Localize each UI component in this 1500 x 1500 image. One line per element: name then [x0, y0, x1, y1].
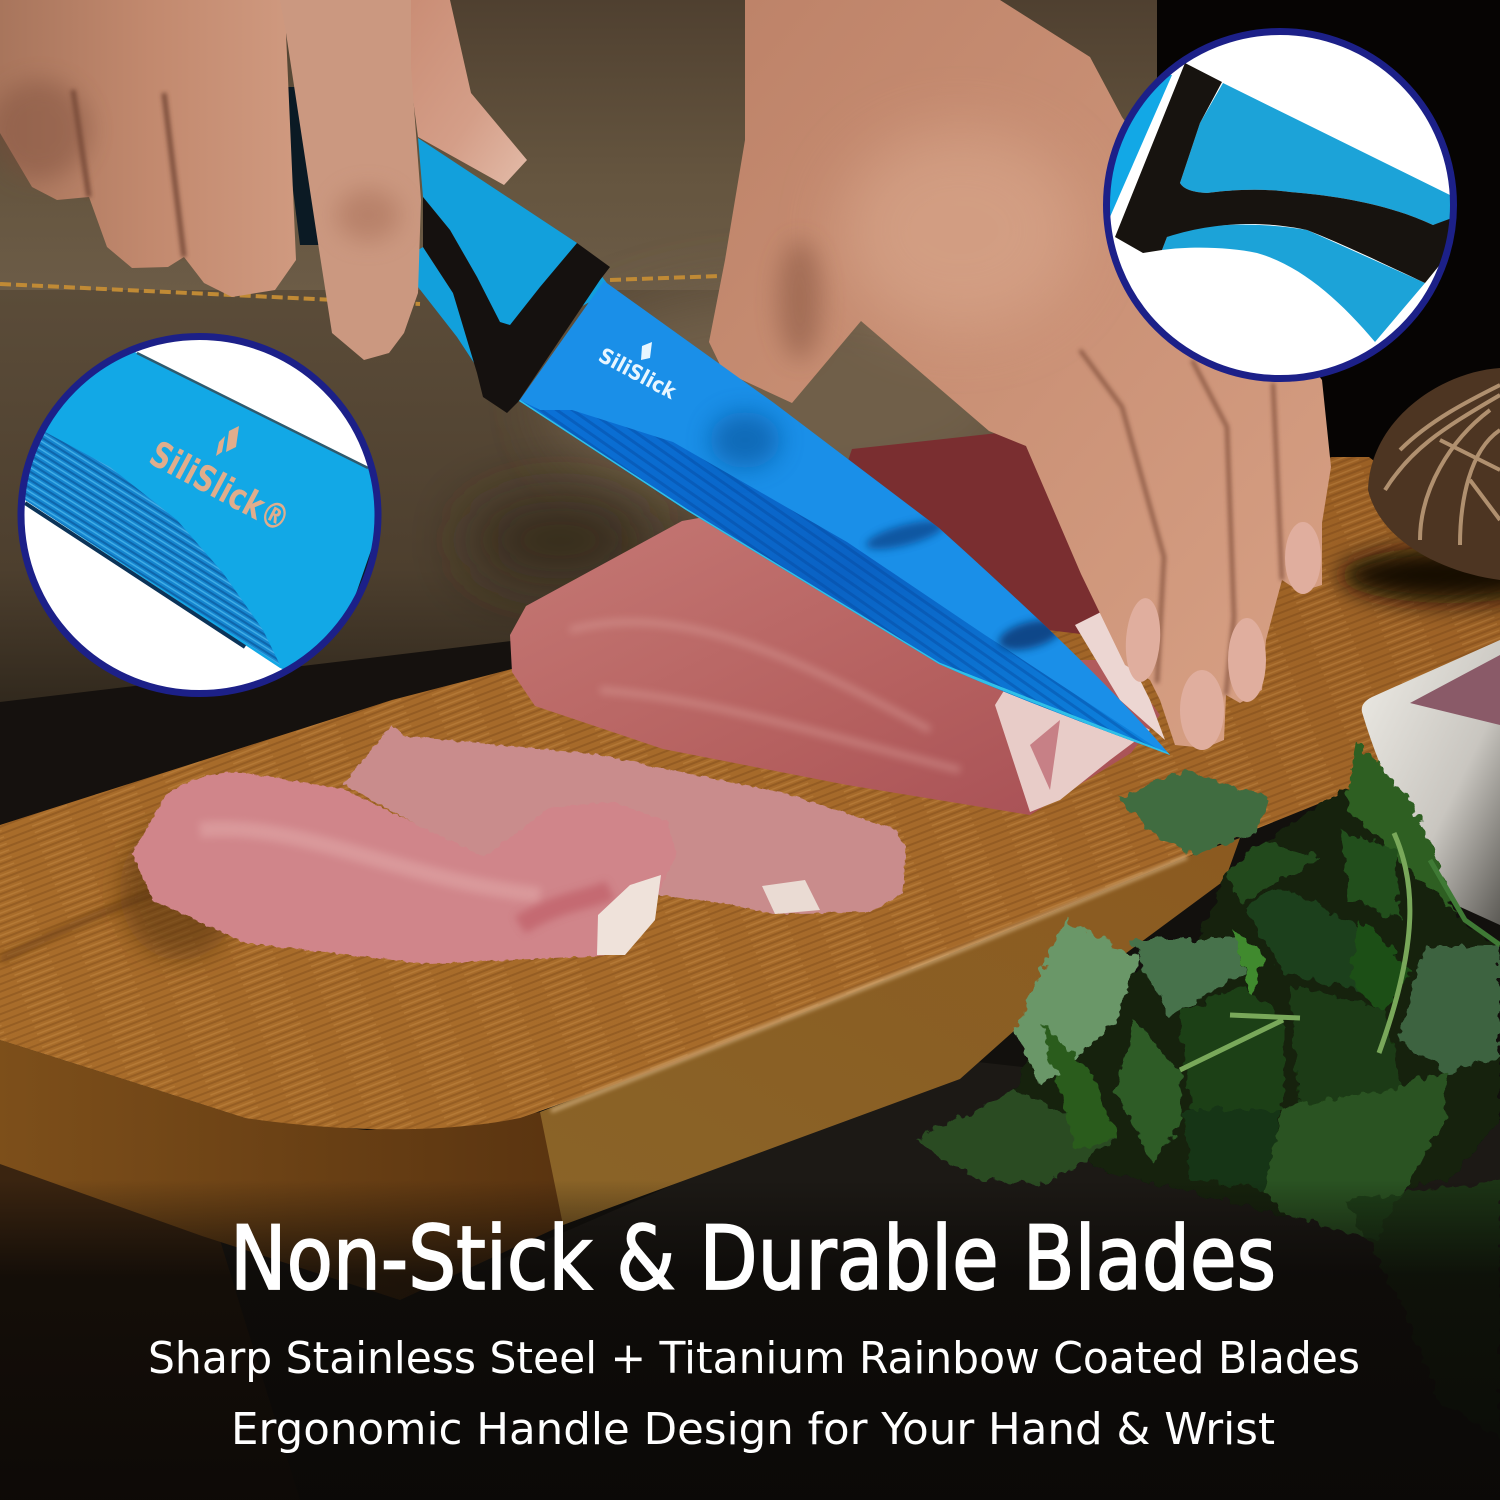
herbs: cilantro sprigs	[915, 740, 1500, 1240]
hand: left hand holding the knife	[0, 0, 527, 360]
inset blade strip	[1110, 75, 1172, 217]
finger gaps	[1080, 350, 1282, 695]
palm and back fingers	[0, 0, 300, 297]
shiitake mushroom	[1340, 368, 1500, 603]
board top face	[0, 457, 1500, 1129]
inset serrated edge	[25, 432, 280, 665]
inset circle: blade logo close-up	[0, 335, 400, 700]
hand: right hand steadying the meat	[709, 0, 1331, 750]
meat: front slice	[132, 772, 677, 964]
knife bolster	[423, 197, 610, 413]
knife logo text: SiliSlick	[595, 343, 681, 404]
inset logo text: SiliSlick®	[143, 434, 296, 541]
loin fat marbling	[995, 665, 1150, 812]
front slice fat	[597, 875, 661, 955]
small white bowl	[1362, 640, 1500, 925]
meat: back slice	[343, 725, 906, 914]
fingernails	[1123, 522, 1321, 750]
leaves against the bowl	[1346, 740, 1456, 913]
dim leaves behind caption	[1345, 1180, 1500, 1440]
herb stems	[1180, 833, 1500, 1070]
thumb over the handle	[400, 0, 527, 185]
herb mass shadow	[1015, 780, 1500, 1215]
cutting board	[0, 457, 1500, 1300]
knife blade	[500, 270, 1180, 760]
table surface under the board	[0, 1060, 1500, 1500]
inset blade body	[25, 352, 374, 669]
knife handle behind fingers	[280, 87, 330, 245]
inset upper blue grip	[1180, 83, 1460, 225]
board side: right face	[540, 838, 1240, 1225]
knife	[280, 87, 1180, 760]
meat: main pork loin	[510, 433, 1165, 815]
knife logo icon	[641, 342, 652, 360]
bottom dark gradient	[0, 1180, 1500, 1500]
subtitle line 1: Sharp Stainless Steel + Titanium Rainbow Coated Blades	[148, 1333, 1360, 1384]
front finger on the handle	[280, 0, 421, 360]
knife handle: upper blue grip	[418, 138, 612, 345]
inset circle: handle close-up	[1090, 31, 1460, 379]
board side: left face	[0, 1040, 563, 1300]
inset lower blue grip	[1162, 225, 1425, 342]
inset black grip band	[1115, 63, 1460, 283]
subtitle line 2: Ergonomic Handle Design for Your Hand & Wrist	[231, 1404, 1275, 1455]
bright curled leaf	[1015, 920, 1138, 1087]
meat: back slice fat	[762, 880, 820, 914]
leaf on board	[1118, 770, 1270, 855]
knife handle: lower blue grip	[418, 247, 482, 375]
inset logo icon	[216, 426, 239, 456]
title: Non-Stick & Durable Blades	[230, 1207, 1276, 1310]
